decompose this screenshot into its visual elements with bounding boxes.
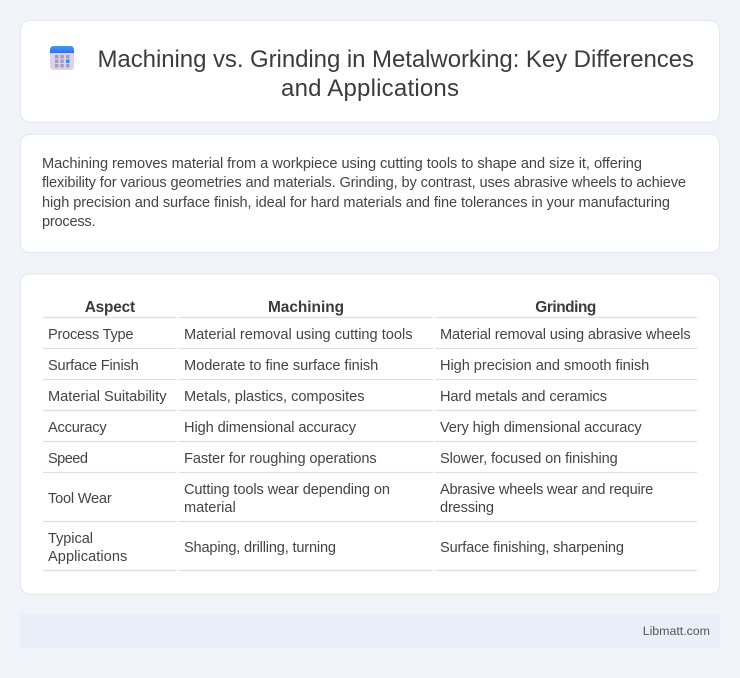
table row: tool wear: Cutting tools wear depending on: [184, 482, 390, 498]
table header row: Grinding: [535, 299, 596, 316]
text block: introduction paragraph: high precision and surface finish, ideal for hard materials and fine tolerances in your manufacturing: [42, 195, 670, 211]
table row: speed: Faster for roughing operations: [184, 451, 377, 467]
table row: tool wear: Abrasive wheels wear and require: [440, 482, 653, 498]
footer credit: Libmatt.com: [643, 624, 710, 638]
table row: tool wear: Tool Wear: [48, 491, 112, 507]
text block: introduction paragraph: Machining removes material from a workpiece using cutting tools to shape and size it, offering: [42, 156, 642, 172]
table row: surface finish: Surface Finish: [48, 358, 139, 374]
table header row: [85, 299, 596, 316]
table row: tool wear: material: [184, 500, 236, 516]
table row: accuracy: [48, 420, 642, 436]
table row: typical applications: Typical: [48, 531, 93, 547]
table row: typical applications: Applications: [48, 549, 127, 565]
table row: process type: Material removal using cutting tools: [184, 327, 412, 343]
icon: calendar: [50, 46, 74, 70]
table row: speed: Speed: [48, 451, 88, 467]
footer: [20, 614, 720, 648]
table row: material suitability: [48, 389, 607, 405]
panel: header card: [20, 20, 720, 122]
table row: process type: Material removal using abrasive wheels: [440, 327, 691, 343]
title: Machining vs. Grinding in Metalworking: Key Differences: [98, 46, 694, 73]
table row: typical applications: [48, 531, 624, 565]
title: [98, 46, 694, 102]
table row: surface finish: High precision and smooth finish: [440, 358, 649, 374]
table row: typical applications: Shaping, drilling, turning: [184, 540, 336, 556]
title: and Applications: [281, 75, 459, 102]
text block: introduction paragraph: process.: [42, 214, 96, 230]
table row: speed: Slower, focused on finishing: [440, 451, 618, 467]
table row: material suitability: Metals, plastics, composites: [184, 389, 364, 405]
table row: process type: [48, 327, 691, 343]
table header row: Machining: [268, 299, 344, 316]
table row: speed: [48, 451, 618, 467]
panel: introduction: [20, 134, 720, 252]
table row: material suitability: Hard metals and ceramics: [440, 389, 607, 405]
text block: introduction paragraph: flexibility for various geometries and materials. Grinding, by contrast, uses abrasive wheels to achieve: [42, 175, 686, 191]
table header row: Aspect: [85, 299, 135, 316]
table row: process type: Process Type: [48, 327, 134, 343]
text block: introduction paragraph: [42, 156, 686, 230]
table row: accuracy: Accuracy: [48, 420, 107, 436]
table row: surface finish: [48, 358, 649, 374]
table row: material suitability: Material Suitability: [48, 389, 167, 405]
table row: accuracy: Very high dimensional accuracy: [440, 420, 642, 436]
table row: tool wear: [48, 482, 653, 516]
table row: accuracy: High dimensional accuracy: [184, 420, 357, 436]
table row: tool wear: dressing: [440, 500, 494, 516]
panel: comparison table: [20, 274, 720, 594]
table row: typical applications: Surface finishing, sharpening: [440, 540, 624, 556]
table row: surface finish: Moderate to fine surface finish: [184, 358, 378, 374]
